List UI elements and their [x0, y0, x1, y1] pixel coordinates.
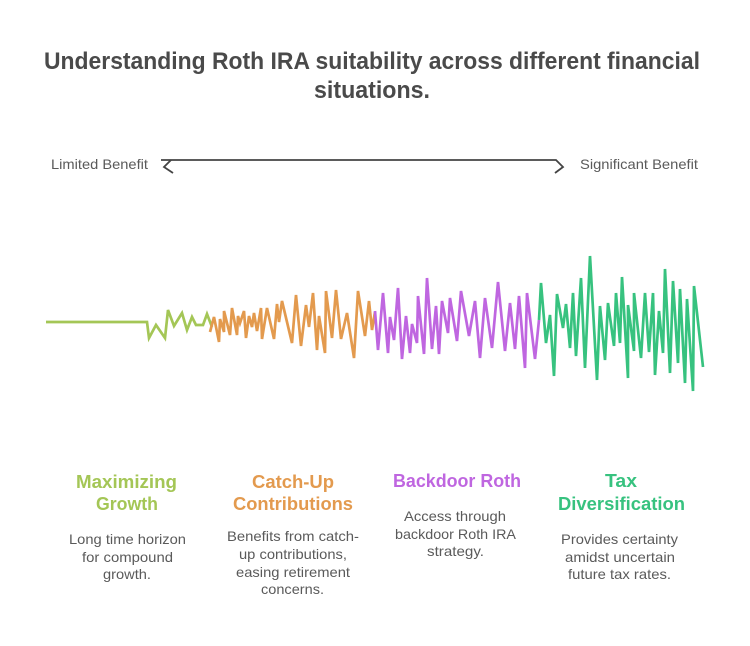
title — [44, 48, 700, 104]
heading: tax diversification: Tax — [605, 471, 637, 491]
heading: catch-up contributions — [233, 472, 353, 514]
heading: tax diversification: Diversification — [558, 494, 685, 514]
heading: maximizing growth: Maximizing — [76, 472, 177, 492]
text: catch-up contributions description: Benefits from catch- — [227, 528, 359, 544]
text: catch-up contributions description: easing retirement — [236, 564, 350, 580]
text: maximizing growth description — [69, 531, 186, 582]
text: tax diversification description: future tax rates. — [568, 566, 671, 582]
text: tax diversification description — [561, 531, 678, 582]
column: catch-up contributions — [227, 472, 359, 597]
text: tax diversification description: amidst uncertain — [565, 549, 675, 565]
text: backdoor roth description: Access through — [404, 508, 506, 524]
text: maximizing growth description: growth. — [103, 566, 151, 582]
text: catch-up contributions description — [227, 528, 359, 597]
text: catch-up contributions description: concerns. — [261, 581, 324, 597]
heading: catch-up contributions: Catch-Up — [252, 472, 334, 492]
label: limited benefit: Limited Benefit — [51, 156, 148, 172]
column: backdoor roth — [393, 471, 521, 559]
column: tax diversification — [558, 471, 685, 582]
text: maximizing growth description: Long time horizon — [69, 531, 186, 547]
text: catch-up contributions description: up contributions, — [239, 546, 347, 562]
heading: backdoor roth: Backdoor Roth — [393, 471, 521, 491]
text: maximizing growth description: for compound — [82, 549, 173, 565]
double-headed arrow — [161, 160, 563, 173]
title: situations. — [314, 77, 430, 104]
text: backdoor roth description: strategy. — [427, 543, 484, 559]
text: backdoor roth description: backdoor Roth IRA — [395, 526, 517, 542]
waveform: maximizing growth segment — [46, 310, 212, 338]
waveform: backdoor roth segment — [375, 278, 539, 368]
heading: tax diversification — [558, 471, 685, 514]
column: maximizing growth — [69, 472, 186, 582]
waveform: catch-up contributions segment — [210, 290, 375, 358]
title: Understanding Roth IRA suitability across different financial — [44, 48, 700, 75]
waveform: tax diversification segment — [539, 256, 703, 391]
label: significant benefit: Significant Benefit — [580, 156, 698, 172]
text: tax diversification description: Provides certainty — [561, 531, 678, 547]
heading: maximizing growth — [76, 472, 177, 514]
scale: limited to significant benefit — [51, 156, 698, 173]
text: backdoor roth description — [395, 508, 517, 559]
heading: catch-up contributions: Contributions — [233, 494, 353, 514]
waveform chart — [46, 256, 703, 391]
heading: maximizing growth: Growth — [96, 494, 158, 514]
